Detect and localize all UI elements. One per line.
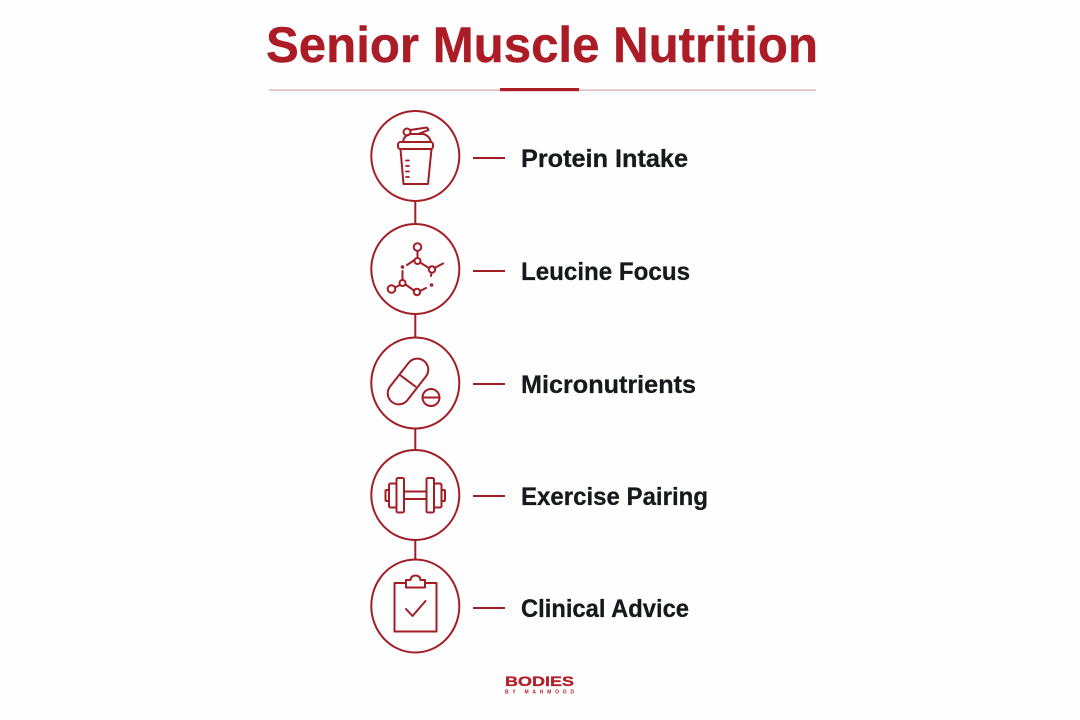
connector dash [473,157,505,159]
icon: clipboard [371,560,459,652]
timeline connector [414,201,416,559]
icon: molecule [371,224,459,314]
icon: shaker bottle [371,111,459,201]
item: Protein Intake [371,111,688,201]
label: Exercise Pairing [521,483,708,511]
label: Leucine Focus [521,258,690,286]
item: Micronutrients [371,338,696,428]
icon: dumbbell [371,450,459,540]
connector dash [473,270,505,272]
item: Exercise Pairing [371,450,708,540]
logo: BY MAHMOOD [505,690,574,696]
item: Clinical Advice [371,560,689,652]
label: Micronutrients [521,371,696,399]
connector dash [473,607,505,609]
title underline [269,88,816,91]
logo: BODIES [505,673,574,689]
label: Clinical Advice [521,595,689,623]
connector dash [473,383,505,385]
logo [505,673,574,696]
connector dash [473,495,505,497]
label: Protein Intake [521,145,688,173]
icon: pills [371,338,459,428]
title: Senior Muscle Nutrition [266,17,818,73]
item: Leucine Focus [371,224,690,314]
